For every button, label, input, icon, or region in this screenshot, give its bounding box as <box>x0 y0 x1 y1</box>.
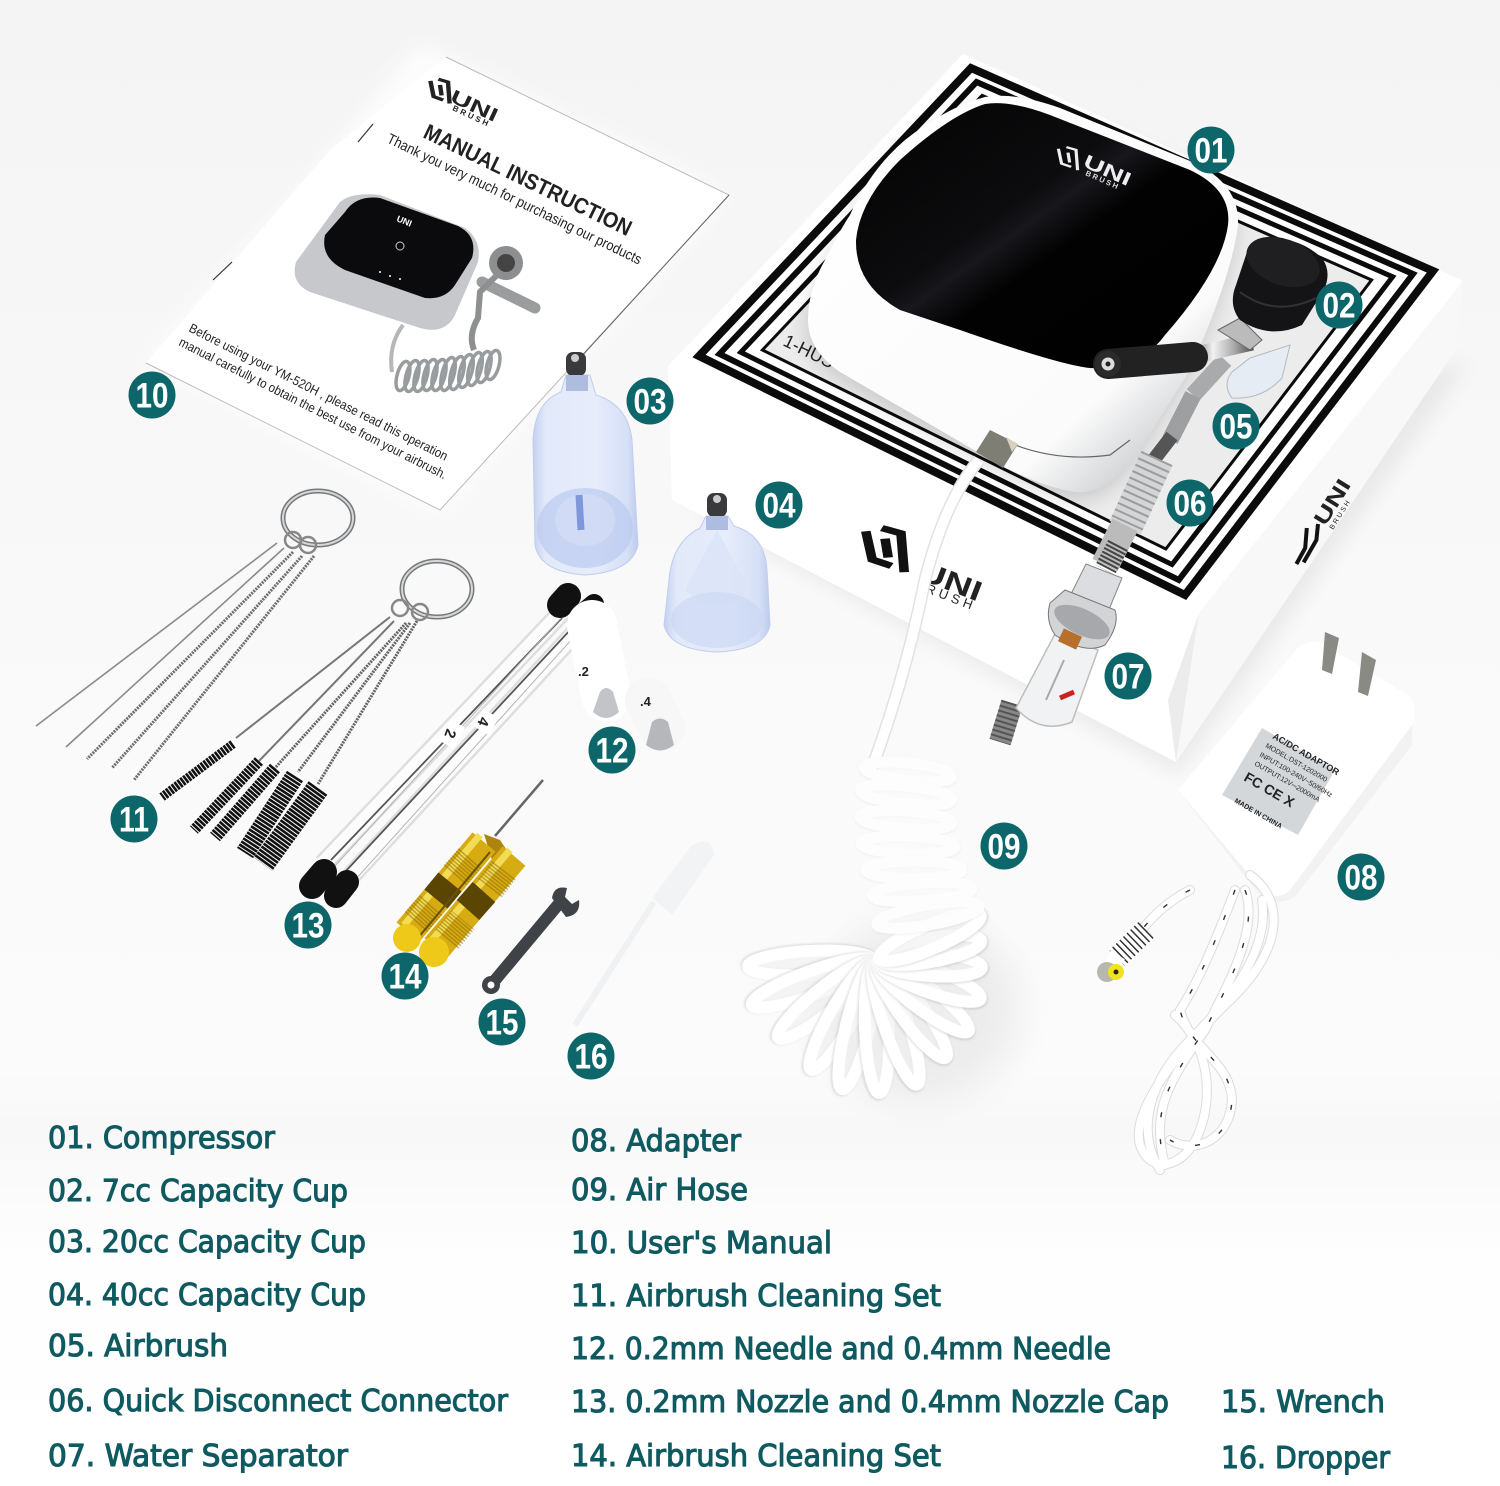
14 gold tool <box>393 780 543 967</box>
badge 07 <box>1104 652 1152 700</box>
adapter label: OUTPUT:12V⎓2000mA <box>1253 761 1321 804</box>
badge 16 <box>568 1032 614 1080</box>
parts list: right column: 15. Wrench <box>1221 1385 1385 1420</box>
badge 11: 11 <box>119 800 149 840</box>
badge 06 <box>1166 480 1214 526</box>
parts list: left column <box>48 1121 509 1474</box>
04 40cc cup <box>664 493 770 652</box>
box logo: side: BRUSH <box>1329 498 1353 531</box>
parts list: middle column: 09. Air Hose <box>571 1173 748 1208</box>
badge 12: 12 <box>596 732 628 770</box>
manual illustration: compressor: UNI <box>395 214 413 229</box>
13 nozzle tubes: 2 <box>440 727 459 740</box>
user's manual <box>146 45 729 510</box>
adapter label <box>1222 728 1341 835</box>
compressor logo: BRUSH <box>1084 169 1121 192</box>
adapter label: FC CE X <box>1242 769 1298 811</box>
12 needles: .2 <box>578 664 589 679</box>
adapter label: MODEL:DST-1202000 <box>1264 743 1328 784</box>
15 wrench <box>482 887 579 994</box>
badge 06: 06 <box>1174 484 1206 524</box>
parts list: right column <box>1221 1385 1391 1476</box>
adapter label: INPUT:100-240V~50/60Hz <box>1258 752 1334 799</box>
parts list: middle column: 11. Airbrush Cleaning Set <box>571 1279 941 1314</box>
user's manual: UNI <box>447 86 501 127</box>
06 quick disconnect connector <box>1105 395 1193 570</box>
gift box: 1-HUS <box>780 331 838 372</box>
parts list: middle column: 10. User's Manual <box>571 1226 832 1261</box>
parts list: left column: 03. 20cc Capacity Cup <box>48 1225 366 1260</box>
parts list: middle column: 14. Airbrush Cleaning Set <box>571 1439 941 1474</box>
12 needles <box>578 625 674 750</box>
13 nozzle tubes <box>312 596 594 896</box>
badge 16: 16 <box>574 1038 608 1076</box>
parts list: right column: 16. Dropper <box>1221 1441 1391 1476</box>
parts list: left column: 05. Airbrush <box>48 1329 228 1364</box>
parts list: middle column <box>571 1124 1169 1474</box>
badge 15: 15 <box>486 1004 518 1042</box>
badge 10 <box>128 372 176 418</box>
hose coil <box>747 758 985 1093</box>
05 airbrush <box>1095 318 1290 398</box>
badge 15 <box>478 998 526 1046</box>
parts list: middle column: 12. 0.2mm Needle and 0.4mm Needle <box>571 1332 1111 1367</box>
parts list: left column: 01. Compressor <box>48 1121 276 1156</box>
badge 01: 01 <box>1194 132 1228 170</box>
badge 13 <box>284 902 332 948</box>
01 compressor <box>806 96 1238 500</box>
03 20cc cup <box>533 352 638 575</box>
box logo: front: UNI <box>914 555 987 607</box>
parts list: middle column: 13. 0.2mm Nozzle and 0.4mm Nozzle Cap <box>571 1385 1169 1420</box>
badge 04 <box>756 482 802 528</box>
adapter label: AC/DC ADAPTOR <box>1271 731 1341 777</box>
badge 14 <box>382 952 428 1000</box>
badge 14: 14 <box>388 958 422 996</box>
manual illustration: compressor <box>295 194 535 393</box>
user's manual: Before using your YM-520H , please read this operation <box>187 320 450 464</box>
box stripes <box>699 68 1433 595</box>
badge 10: 10 <box>136 376 168 416</box>
parts list: left column: 02. 7cc Capacity Cup <box>48 1174 348 1209</box>
parts list: middle column: 08. Adapter <box>571 1124 742 1159</box>
09 air hose <box>747 430 1020 1100</box>
12 needles: .4 <box>640 694 652 709</box>
number badges <box>110 126 1384 1080</box>
badge 08 <box>1338 854 1384 900</box>
13 nozzle tubes: 4 <box>473 715 492 729</box>
parts list: left column: 07. Water Separator <box>48 1439 349 1474</box>
badge 03: 03 <box>634 382 666 422</box>
box logo: side: UNI <box>1310 475 1356 530</box>
box logo: front: RUSH <box>924 581 979 614</box>
gift box <box>668 54 1470 775</box>
parts list: left column: 04. 40cc Capacity Cup <box>48 1278 366 1313</box>
parts list: left column: 06. Quick Disconnect Connector <box>48 1384 509 1419</box>
badge 04: 04 <box>762 486 796 526</box>
user's manual: manual carefully to obtain the best use from your airbrush. <box>177 334 449 482</box>
badge 02: 02 <box>1322 286 1356 326</box>
16 dropper <box>575 842 714 1025</box>
badge 09: 09 <box>988 828 1020 866</box>
compressor logo <box>1058 147 1134 192</box>
badge 13: 13 <box>292 906 324 946</box>
badge 05: 05 <box>1220 408 1252 446</box>
11 cleaning set <box>36 491 472 864</box>
adapter label: MADE IN CHINA <box>1233 798 1283 831</box>
badge 02 <box>1316 282 1362 328</box>
box logo: side <box>1296 475 1356 564</box>
compressor logo: UNI <box>1080 151 1134 191</box>
adapter cord <box>1097 875 1274 1170</box>
07 water separator <box>1000 564 1122 742</box>
badge 11 <box>110 796 158 842</box>
badge 05 <box>1212 402 1260 450</box>
02 7cc cup <box>1233 227 1328 331</box>
user's manual: MANUAL INSTRUCTION <box>420 119 636 241</box>
badge 09 <box>980 822 1028 870</box>
08 adapter <box>1097 632 1415 1170</box>
badge 12 <box>588 726 636 774</box>
badge 08: 08 <box>1344 858 1378 898</box>
user's manual: Thank you very much for purchasing our products <box>384 131 644 268</box>
box logo: front <box>866 528 987 614</box>
badge 03 <box>626 378 674 424</box>
badge 01 <box>1188 126 1234 174</box>
badge 07: 07 <box>1112 658 1144 696</box>
user's manual: BRUSH <box>451 104 492 129</box>
